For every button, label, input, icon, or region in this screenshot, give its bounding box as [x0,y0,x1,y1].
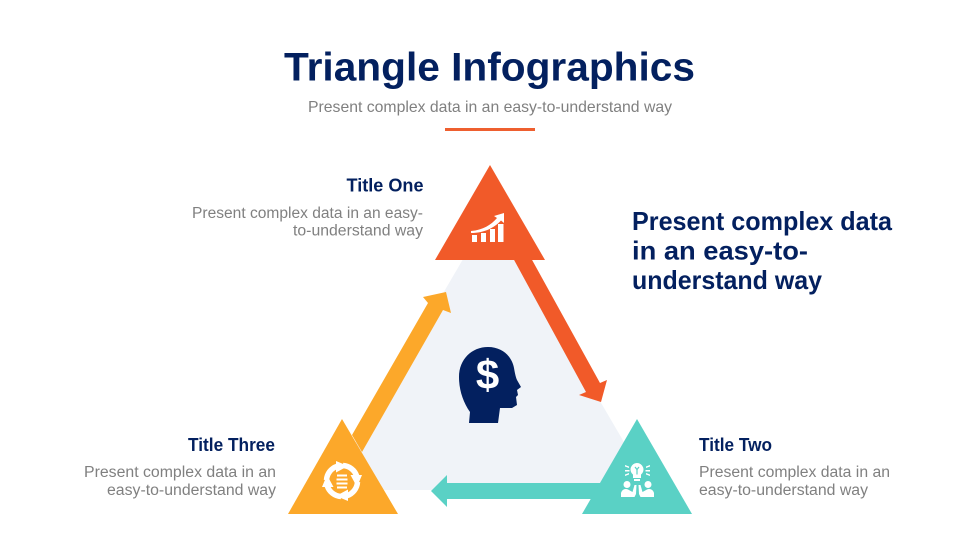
subtitle: Present complex data in an easy-to-understand way [308,99,672,116]
callout: key message [632,206,893,295]
text block: title two: Present complex data in an [699,464,890,481]
arrow: orange, top to right [513,258,607,402]
text block: title one: Title One [346,176,424,196]
text block: title three: easy-to-understand way [107,482,276,499]
text block: title three: Present complex data in an [84,464,276,481]
text block: title two [699,435,890,499]
text block: title one: to-understand way [293,222,423,240]
text block: title three: Title Three [188,435,275,455]
callout: key message: in an easy-to- [632,236,808,266]
text block: title one [192,176,424,240]
icon: people with light bulb [621,463,654,497]
right triangle with idea icon [582,419,692,514]
arrow: teal, right to left [431,475,610,507]
title accent bar [445,128,535,131]
callout: key message: Present complex data [632,206,893,236]
icon: growth chart [471,213,504,242]
icon: head with dollar sign [459,347,521,423]
callout: key message: understand way [632,265,823,295]
icon: head with dollar sign: $ [476,351,499,398]
left triangle with cycle icon [288,419,398,514]
text block: title three [84,435,276,499]
text block: title two: Title Two [699,435,772,455]
text block: title one: Present complex data in an easy- [192,205,423,222]
icon: cycle with list [322,461,362,501]
title: Triangle Infographics [284,46,695,90]
central light triangle [328,213,652,490]
top triangle with chart icon [435,165,545,260]
arrow: yellow, left to top [352,292,451,452]
text block: title two: easy-to-understand way [699,482,868,499]
